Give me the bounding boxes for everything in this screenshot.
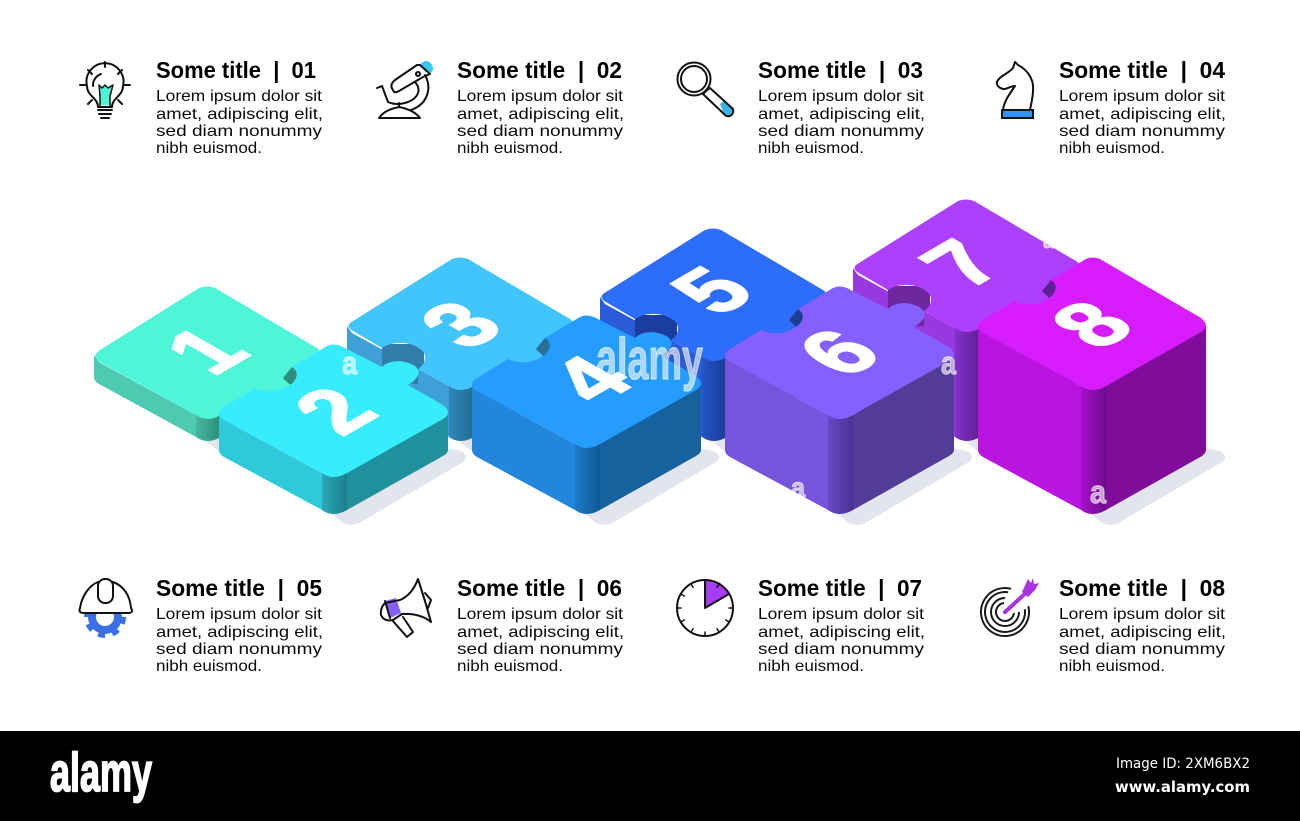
text block 06: nibh euismod. [457, 658, 563, 675]
text block 06: sed diam nonummy [457, 641, 623, 658]
text block 05: Lorem ipsum dolor sit [156, 606, 323, 623]
icon: megaphone [381, 579, 431, 637]
text block 05 [156, 575, 323, 675]
text block 06: Lorem ipsum dolor sit [457, 606, 624, 623]
text block 02: amet, adipiscing elit, [457, 106, 624, 123]
footer bar: www.alamy.com [1115, 778, 1250, 796]
puzzle piece 7 [853, 200, 1081, 441]
text block 06: amet, adipiscing elit, [457, 624, 624, 641]
text block 03: Lorem ipsum dolor sit [758, 88, 925, 105]
footer bar [0, 731, 1300, 821]
text block 06 [457, 575, 624, 675]
icon: target with arrow [976, 578, 1039, 641]
puzzle piece 1 [94, 286, 322, 441]
text block 08: Some title | 08 [1059, 575, 1225, 601]
puzzle piece 4: 4 [529, 344, 654, 416]
text block 04: nibh euismod. [1059, 140, 1165, 157]
puzzle piece 8: 8 [1030, 289, 1155, 361]
text block 03 [758, 57, 925, 157]
puzzle piece 7: 7 [900, 228, 1025, 300]
watermark marks [342, 231, 1106, 510]
text block 07: Lorem ipsum dolor sit [758, 606, 925, 623]
icon: clock [677, 580, 733, 636]
text block 08: sed diam nonummy [1059, 641, 1225, 658]
text block 05: nibh euismod. [156, 658, 262, 675]
text block 01: Lorem ipsum dolor sit [156, 88, 323, 105]
icon: chess knight [997, 62, 1033, 118]
text block 01: amet, adipiscing elit, [156, 106, 323, 123]
text block 08: amet, adipiscing elit, [1059, 624, 1226, 641]
puzzle piece 2 [219, 344, 448, 514]
text block 02: nibh euismod. [457, 140, 563, 157]
puzzle piece 6 [725, 286, 954, 514]
text block 08: Lorem ipsum dolor sit [1059, 606, 1226, 623]
icon: light bulb [80, 62, 130, 118]
watermark marks: alamy [596, 327, 703, 392]
text block 06: Some title | 06 [457, 575, 622, 601]
text block 04: Some title | 04 [1059, 57, 1225, 83]
footer bar: alamy [50, 741, 152, 803]
puzzle piece 4 [472, 316, 701, 514]
text block 01: nibh euismod. [156, 140, 262, 157]
text block 02: Some title | 02 [457, 57, 622, 83]
text block 03: amet, adipiscing elit, [758, 106, 925, 123]
puzzle piece 6: 6 [777, 317, 902, 389]
text block 02: Lorem ipsum dolor sit [457, 88, 624, 105]
text block 04: sed diam nonummy [1059, 123, 1225, 140]
text block 01: Some title | 01 [156, 57, 316, 83]
text block 04: Lorem ipsum dolor sit [1059, 88, 1226, 105]
watermark marks: a [1090, 474, 1106, 510]
watermark marks: a [791, 472, 805, 503]
puzzle piece 3 [347, 258, 575, 441]
text block 07: Some title | 07 [758, 575, 922, 601]
text block 02: sed diam nonummy [457, 123, 623, 140]
text block 07 [758, 575, 925, 675]
text block 03: sed diam nonummy [758, 123, 924, 140]
puzzle piece 5: 5 [650, 255, 775, 327]
text block 05: Some title | 05 [156, 575, 322, 601]
text block 05: sed diam nonummy [156, 641, 322, 658]
text block 08: nibh euismod. [1059, 658, 1165, 675]
puzzle piece 1: 1 [144, 315, 269, 387]
text block 02 [457, 57, 624, 157]
icon: microscope [377, 61, 433, 118]
icon: helmet and gear [80, 579, 132, 636]
watermark marks: a [1043, 231, 1055, 253]
text block 03: Some title | 03 [758, 57, 923, 83]
text block 03: nibh euismod. [758, 140, 864, 157]
puzzle piece 3: 3 [399, 289, 524, 361]
watermark marks: a [342, 345, 357, 381]
block shadows [202, 375, 1225, 525]
text block 07: sed diam nonummy [758, 641, 924, 658]
footer bar: Image ID: 2XM6BX2 [1116, 756, 1250, 772]
text block 01 [156, 57, 323, 157]
text block 04 [1059, 57, 1226, 157]
watermark marks: a [941, 345, 956, 381]
icon: magnifier [678, 62, 733, 116]
puzzle piece 2: 2 [273, 375, 398, 447]
text block 08 [1059, 575, 1226, 675]
text block 07: amet, adipiscing elit, [758, 624, 925, 641]
text block 07: nibh euismod. [758, 658, 864, 675]
text block 05: amet, adipiscing elit, [156, 624, 323, 641]
text block 01: sed diam nonummy [156, 123, 322, 140]
puzzle piece 8 [978, 258, 1206, 514]
text block 04: amet, adipiscing elit, [1059, 106, 1226, 123]
puzzle piece 5 [600, 228, 828, 441]
